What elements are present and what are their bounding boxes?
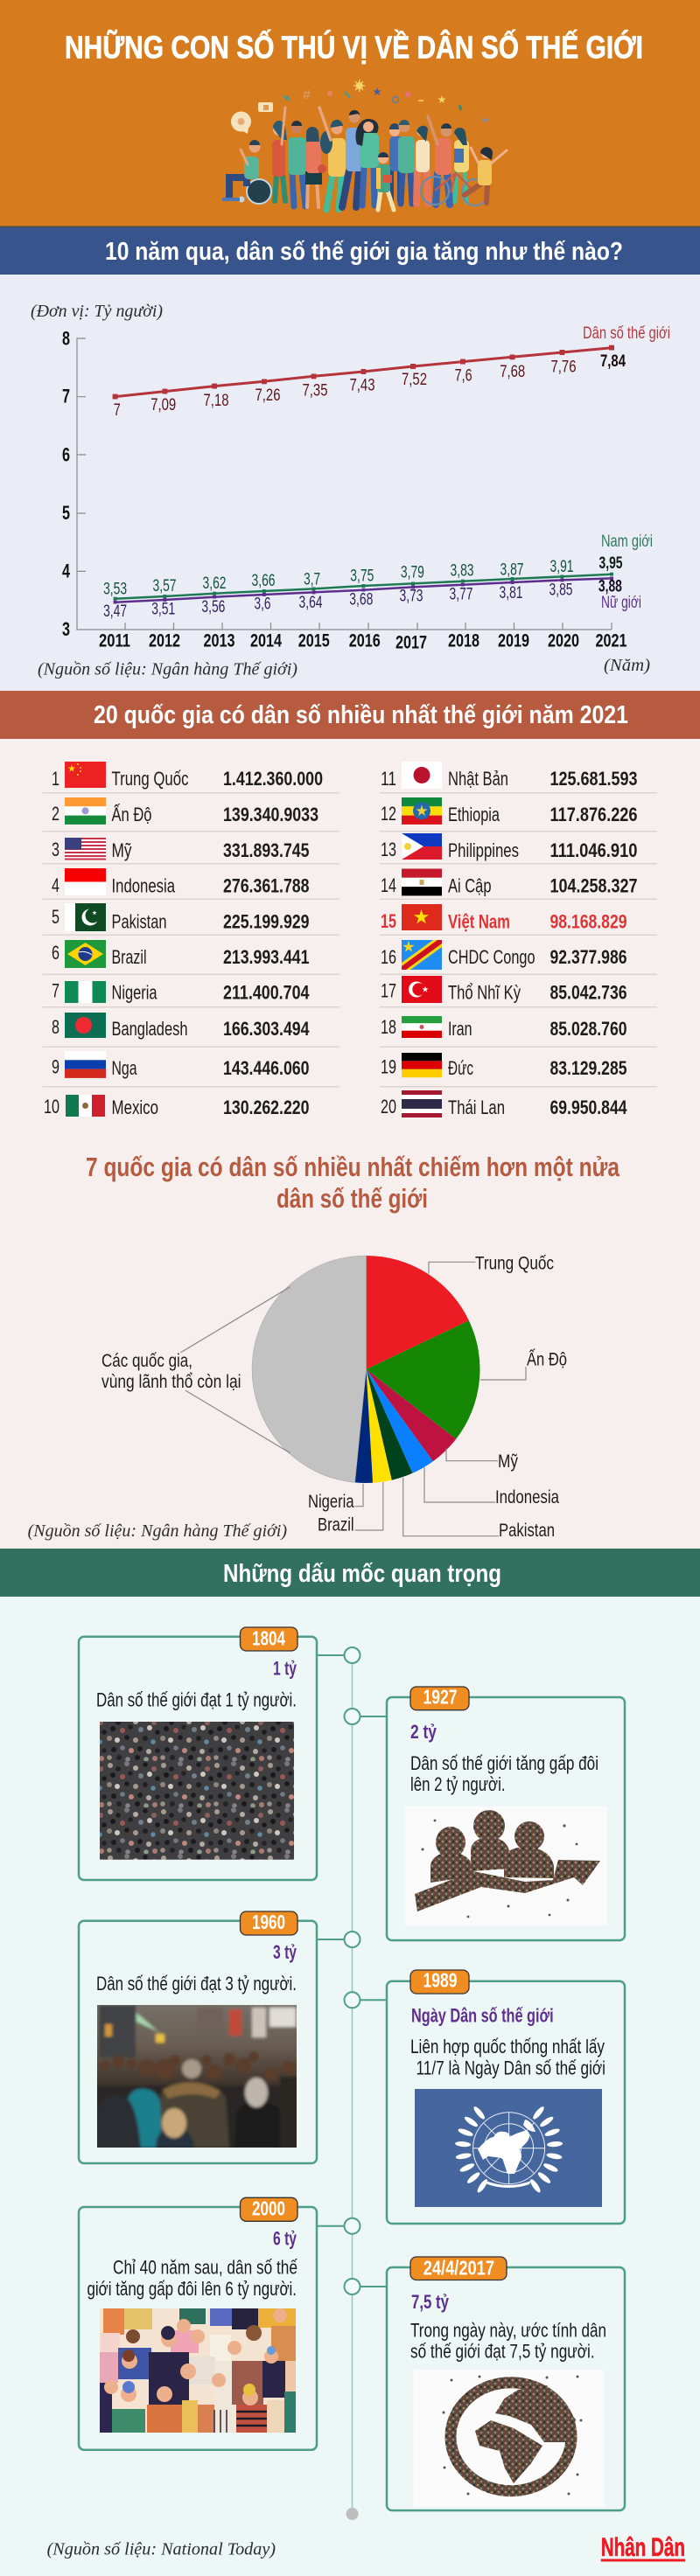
- description: Trong ngày này, ước tính dân: [410, 2320, 606, 2342]
- values: female: 3,85: [550, 581, 572, 600]
- description: [410, 1752, 598, 1795]
- series legends: [583, 324, 670, 612]
- row 17: Turkey: Thổ Nhĩ Kỳ: [448, 982, 521, 1004]
- values: male: 3,91: [550, 558, 574, 576]
- amount: 7,5 tỷ: [411, 2291, 450, 2313]
- heading band: population growth: 10 năm qua, dân số thế giới gia tăng như thế nào?: [105, 238, 623, 266]
- row 17: Turkey: [381, 976, 626, 1004]
- row 13: Philippines: [381, 833, 637, 861]
- row 16: DR Congo: 16: [381, 946, 396, 968]
- row 5: Pakistan: 225.199.929: [223, 911, 310, 933]
- row 20: Thailand: 69.950.844: [550, 1097, 627, 1118]
- subheading: seven countries: [86, 1152, 620, 1214]
- series line: female: [116, 578, 612, 602]
- row 7: Nigeria: 7: [52, 980, 60, 1002]
- x axis labels: 2011: [99, 630, 130, 651]
- row 17: Turkey: 85.042.736: [550, 982, 626, 1004]
- badge: 1927: [424, 1686, 457, 1709]
- description: Dân số thế giới đạt 3 tỷ người.: [96, 1973, 297, 1995]
- row 18: Iran: [381, 1016, 626, 1040]
- row 18: Iran: 18: [381, 1016, 396, 1038]
- axis unit: year: (Năm): [604, 656, 650, 675]
- row 12: Ethiopia: 117.876.226: [550, 804, 637, 825]
- values: world: 7: [114, 401, 121, 420]
- y axis labels: 8: [62, 327, 70, 350]
- row 12: Ethiopia: 12: [381, 803, 396, 825]
- heading band: milestones: [0, 1549, 700, 1597]
- values: male: 3,79: [401, 564, 424, 582]
- row 9: Russia: 9: [52, 1056, 60, 1078]
- x axis labels: 2012: [149, 630, 180, 651]
- row 15: Vietnam (highlight): 98.168.829: [550, 911, 626, 933]
- row 12: Ethiopia: [381, 797, 637, 825]
- row 4: Indonesia: 4: [52, 874, 60, 896]
- row 11: Japan: 125.681.593: [550, 768, 637, 790]
- pie labels: vùng lãnh thổ còn lại: [102, 1372, 242, 1392]
- row 15: Vietnam (highlight): Việt Nam: [448, 911, 510, 933]
- figure: bicycle: [421, 173, 488, 205]
- values: female: 3,88: [598, 578, 622, 596]
- badge: 1989: [424, 1969, 457, 1992]
- values: male: 3,53: [103, 580, 127, 598]
- row 4: Indonesia: 276.361.788: [223, 875, 310, 897]
- pie labels: Ấn Độ: [527, 1350, 567, 1370]
- row 20: Thailand: 20: [381, 1096, 396, 1117]
- row 9: Russia: 143.446.060: [223, 1057, 310, 1079]
- pie labels: Nigeria: [308, 1492, 354, 1512]
- row 2: India: Ấn Độ: [112, 804, 152, 825]
- table: top 20 countries: [42, 762, 657, 1118]
- unit note: (Đơn vị: Tỷ người): [31, 302, 163, 321]
- pie labels: Pakistan: [499, 1521, 555, 1541]
- timeline spine: [317, 1647, 387, 2520]
- amount: 2 tỷ: [410, 1721, 438, 1743]
- y axis labels: 4: [62, 560, 71, 582]
- row 1: China: Trung Quốc: [112, 768, 189, 790]
- description: [410, 2036, 606, 2079]
- row 19: Germany: Đức: [448, 1057, 473, 1079]
- row 13: Philippines: 111.046.910: [550, 839, 637, 861]
- values: world: 7,26: [256, 386, 280, 405]
- row 10: Mexico: 10: [44, 1096, 60, 1117]
- row 6: Brazil: Brazil: [112, 946, 147, 968]
- row 8: Bangladesh: 8: [52, 1016, 60, 1038]
- pie labels: Brazil: [318, 1515, 354, 1535]
- row 7: Nigeria: [52, 980, 310, 1004]
- x axis labels: 2021: [595, 630, 627, 651]
- row 10: Mexico: [44, 1095, 310, 1118]
- row 1: China: 1.412.360.000: [223, 768, 323, 790]
- row 8: Bangladesh: Bangladesh: [112, 1018, 187, 1040]
- values: female: 3,73: [399, 588, 424, 606]
- heading band: top 20 countries: [0, 691, 700, 739]
- values: female: 3,68: [349, 591, 373, 609]
- photo: crowded street: [97, 2005, 297, 2148]
- card: 2000: [79, 2197, 317, 2450]
- row 14: Egypt: 104.258.327: [550, 875, 637, 897]
- y axis labels: 3: [62, 618, 70, 640]
- pie labels: Indonesia: [495, 1487, 559, 1507]
- series line: world: [116, 348, 612, 397]
- row 19: Germany: 19: [381, 1056, 396, 1078]
- badge: 24/4/2017: [424, 2257, 494, 2280]
- subheading: seven countries: dân số thế giới: [276, 1183, 428, 1214]
- values: female: 3,77: [450, 585, 472, 603]
- row 19: Germany: [381, 1053, 626, 1079]
- values: female: 3,47: [103, 602, 127, 621]
- values: world: 7,18: [203, 392, 229, 410]
- values: world: 7,43: [350, 377, 374, 395]
- y axis labels: 7: [62, 385, 70, 407]
- values: male: 3,7: [304, 570, 320, 588]
- x axis labels: 2013: [203, 630, 234, 651]
- series legends: Nữ giới: [601, 594, 641, 612]
- row 7: Nigeria: Nigeria: [112, 982, 158, 1004]
- row 18: Iran: 85.028.760: [550, 1018, 626, 1040]
- row 11: Japan: [381, 762, 637, 790]
- photo: globe formed by people: [413, 2370, 604, 2507]
- row 4: Indonesia: [52, 868, 310, 897]
- illustration: crowd of diverse people: [222, 80, 507, 210]
- row 14: Egypt: 14: [381, 874, 396, 896]
- row 19: Germany: 83.129.285: [550, 1057, 626, 1079]
- photo: people-shaped crowd with rising arrow: [405, 1807, 607, 1925]
- values: female: 3,64: [299, 594, 323, 612]
- values: female: 3,56: [201, 598, 225, 616]
- pie labels: Mỹ: [498, 1452, 518, 1472]
- values: world: 7,35: [303, 382, 327, 400]
- row 20: Thailand: Thái Lan: [448, 1097, 505, 1118]
- row 18: Iran: Iran: [448, 1018, 472, 1040]
- description: [410, 2320, 606, 2363]
- slices: [252, 1256, 480, 1483]
- series legends: Dân số thế giới: [583, 324, 670, 343]
- row 2: India: 2: [52, 803, 60, 825]
- description: lên 2 tỷ người.: [410, 1773, 506, 1795]
- amount: 3 tỷ: [273, 1941, 298, 1963]
- x axis labels: 2015: [298, 630, 330, 651]
- x axis labels: 2018: [448, 630, 480, 651]
- row 11: Japan: 11: [381, 768, 396, 790]
- heading band: top 20 countries: 20 quốc gia có dân số nhiều nhất thế giới năm 2021: [94, 701, 628, 729]
- series legends: Nam giới: [601, 533, 653, 551]
- row 2: India: 139.340.9033: [223, 804, 318, 825]
- row 13: Philippines: Philippines: [448, 839, 519, 861]
- figure: group of standing adults: [272, 108, 469, 210]
- row 13: Philippines: 13: [381, 839, 396, 860]
- values: female: 3,51: [151, 601, 175, 619]
- values: world: 7,6: [455, 367, 472, 386]
- illustration: colorful crowd: [100, 2308, 296, 2433]
- card: 1960: [79, 1911, 317, 2163]
- row 15: Vietnam (highlight): [381, 904, 626, 933]
- x axis labels: 2017: [396, 633, 427, 653]
- card: 1989: [387, 1969, 625, 2224]
- row 5: Pakistan: Pakistan: [112, 911, 166, 933]
- x axis labels: 2014: [250, 630, 282, 651]
- row 2: India: [52, 797, 318, 825]
- amount: 1 tỷ: [273, 1658, 298, 1680]
- figure: child with book: [376, 152, 394, 210]
- y axis labels: 6: [62, 444, 70, 465]
- row 1: China: 1: [52, 768, 60, 790]
- heading band: population growth: [0, 226, 700, 275]
- figure: man in wheelchair: [222, 140, 271, 204]
- values: world: 7,09: [150, 396, 176, 414]
- pie labels: Trung Quốc: [475, 1254, 554, 1274]
- row 8: Bangladesh: 166.303.494: [223, 1018, 310, 1040]
- description: Dân số thế giới tăng gấp đôi: [410, 1752, 598, 1774]
- values: world: [114, 352, 626, 420]
- values: world: 7,52: [402, 371, 427, 389]
- card: 24/4/2017: [387, 2257, 625, 2510]
- line chart: world population 2011–2021: [31, 302, 670, 679]
- values: male: 3,57: [152, 577, 177, 595]
- row 15: Vietnam (highlight): 15: [381, 910, 396, 932]
- description: giới tăng gấp đôi lên 6 tỷ người.: [88, 2278, 297, 2300]
- description: [88, 2257, 298, 2300]
- values: male: [103, 554, 623, 598]
- row 16: DR Congo: CHDC Congo: [448, 946, 536, 968]
- values: male: 3,95: [598, 554, 623, 573]
- x axis labels: 2020: [548, 630, 579, 651]
- values: female: 3,81: [499, 584, 523, 602]
- row 20: Thailand: [381, 1090, 627, 1118]
- row 12: Ethiopia: Ethiopia: [448, 804, 500, 825]
- x axis labels: 2016: [349, 630, 381, 651]
- source note: (Nguồn số liệu: Ngân hàng Thế giới): [38, 660, 298, 679]
- row 11: Japan: Nhật Bản: [448, 768, 508, 790]
- description: Dân số thế giới đạt 1 tỷ người.: [96, 1689, 297, 1711]
- image: United Nations flag: [415, 2089, 602, 2207]
- y axis labels: 5: [62, 502, 70, 524]
- row dividers: [42, 793, 657, 1087]
- card: 1804: [79, 1626, 317, 1880]
- icon: floating symbols: [231, 80, 489, 134]
- description: 11/7 là Ngày Dân số thế giới: [416, 2057, 606, 2079]
- figure: child waving: [465, 147, 507, 203]
- row 8: Bangladesh: [52, 1013, 310, 1040]
- row 5: Pakistan: 5: [52, 906, 60, 928]
- series line: male: [116, 574, 612, 599]
- source note: (Nguồn số liệu: National Today): [47, 2540, 276, 2559]
- y axis labels: [62, 327, 71, 640]
- values: female: 3,6: [254, 595, 271, 614]
- row 16: DR Congo: 92.377.986: [550, 946, 626, 968]
- leader lines: [181, 1262, 526, 1536]
- heading: Ngày Dân số thế giới: [411, 2005, 554, 2027]
- row 16: DR Congo: [381, 940, 626, 970]
- badge: 1960: [252, 1911, 285, 1933]
- values: world: 7,84: [600, 352, 626, 371]
- row 3: USA: [52, 838, 310, 861]
- row 3: USA: 3: [52, 839, 60, 860]
- description: Liên hợp quốc thống nhất lấy: [410, 2036, 605, 2057]
- x axis labels: 2019: [498, 630, 529, 651]
- row 17: Turkey: 17: [381, 980, 396, 1002]
- values: world: 7,76: [551, 359, 576, 377]
- row 14: Egypt: [381, 869, 637, 897]
- row 6: Brazil: 6: [52, 942, 60, 964]
- row 5: Pakistan: [52, 903, 310, 933]
- heading band: milestones: Những dấu mốc quan trọng: [223, 1560, 501, 1588]
- badge: 1804: [252, 1626, 285, 1649]
- values: female: [103, 578, 622, 621]
- row 14: Egypt: Ai Cập: [448, 875, 492, 897]
- pie chart: population share: [28, 1254, 567, 1541]
- icon: floating symbols: #: [303, 87, 312, 102]
- row 6: Brazil: 213.993.441: [223, 946, 310, 968]
- source note: (Nguồn số liệu: Ngân hàng Thế giới): [28, 1521, 287, 1541]
- pie labels: Các quốc gia,: [102, 1351, 192, 1371]
- amount: 6 tỷ: [273, 2228, 298, 2250]
- axes: [77, 338, 612, 630]
- values: male: 3,62: [203, 574, 226, 593]
- x axis labels: [99, 630, 627, 653]
- row 9: Russia: [52, 1051, 310, 1079]
- row 1: China: [52, 762, 323, 790]
- row 9: Russia: Nga: [112, 1057, 137, 1079]
- values: male: 3,87: [500, 560, 523, 579]
- badge: 2000: [252, 2197, 285, 2219]
- row 10: Mexico: 130.262.220: [223, 1097, 310, 1118]
- values: male: 3,66: [252, 572, 275, 590]
- values: world: 7,68: [500, 363, 525, 381]
- values: male: 3,75: [350, 567, 374, 586]
- pie labels: [102, 1254, 567, 1541]
- row 3: USA: 331.893.745: [223, 839, 310, 861]
- description: Chỉ 40 năm sau, dân số thế: [113, 2257, 298, 2279]
- description: số thế giới đạt 7,5 tỷ người.: [410, 2341, 595, 2363]
- card: 1927: [387, 1686, 625, 1940]
- row 4: Indonesia: Indonesia: [112, 875, 176, 897]
- row 10: Mexico: Mexico: [112, 1097, 158, 1118]
- row 3: USA: Mỹ: [112, 839, 131, 861]
- photo: crowd from above: [100, 1722, 294, 1860]
- row 7: Nigeria: 211.400.704: [223, 982, 310, 1004]
- row 6: Brazil: [52, 940, 310, 968]
- values: male: 3,83: [450, 562, 474, 581]
